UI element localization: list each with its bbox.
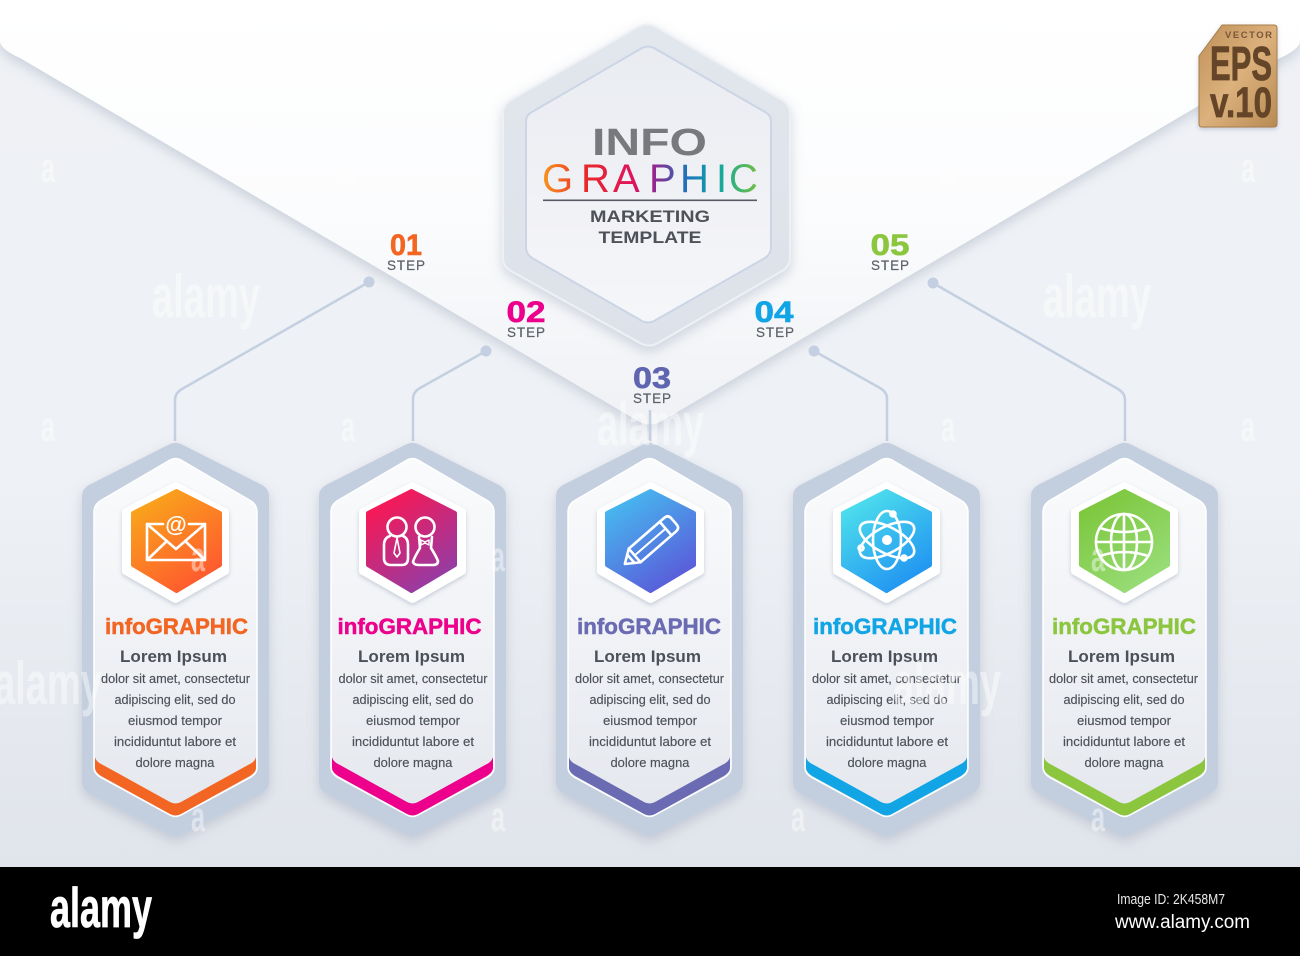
card subheading: Lorem Ipsum: [120, 647, 227, 666]
step label 04: [754, 296, 794, 340]
card body text: incididuntut labore et: [352, 735, 475, 749]
watermarks: a: [1091, 793, 1105, 840]
card subheading: Lorem Ipsum: [1068, 647, 1175, 666]
connector lines: [175, 276, 1125, 441]
card heading: infoGRAPHIC: [105, 614, 248, 639]
card body text: eiusmod tempor: [128, 714, 222, 728]
card body text: dolore magna: [610, 756, 690, 770]
card heading: infoGRAPHIC: [338, 614, 482, 639]
watermarks: alamy: [597, 391, 704, 458]
watermarks: a: [191, 793, 205, 840]
card body text: adipiscing elit, sed do: [1064, 693, 1185, 707]
card subheading: Lorem Ipsum: [594, 647, 701, 666]
card body text: dolor sit amet, consectetur: [338, 672, 488, 686]
card 2: [319, 443, 506, 836]
card body text: eiusmod tempor: [603, 714, 697, 728]
watermarks: a: [41, 403, 55, 450]
card body text: dolor sit amet, consectetur: [1049, 672, 1198, 686]
watermarks: a: [1241, 144, 1255, 191]
subtitle: marketing template: MARKETING: [590, 207, 710, 226]
step label 01: STEP: [387, 258, 425, 273]
watermarks: a: [1241, 403, 1255, 450]
watermarks: a: [41, 144, 55, 191]
watermarks: a: [491, 793, 505, 840]
card body text: incididuntut labore et: [1063, 735, 1186, 749]
card body text: [101, 672, 250, 770]
watermarks: alamy: [893, 650, 1001, 717]
watermarks: a: [491, 533, 505, 580]
top white envelope flap: [0, 0, 1300, 424]
watermarks: a: [941, 144, 955, 191]
step label 04: STEP: [756, 325, 794, 340]
icon: pencil: [601, 486, 700, 599]
step label 03: [633, 362, 671, 406]
card body text: adipiscing elit, sed do: [590, 693, 711, 707]
card 4: [793, 443, 980, 836]
card body text: eiusmod tempor: [840, 714, 934, 728]
step label 04: 04: [754, 296, 794, 329]
card body text: [575, 672, 724, 770]
card body text: incididuntut labore et: [589, 735, 712, 749]
card 3: [556, 443, 743, 836]
card body text: adipiscing elit, sed do: [352, 693, 474, 707]
icon: atom: [837, 486, 936, 599]
step label 05: 05: [870, 229, 910, 262]
subtitle: marketing template: [590, 207, 710, 247]
card body text: [1049, 672, 1198, 770]
card subheading: Lorem Ipsum: [358, 647, 465, 666]
step label 02: [506, 296, 546, 340]
card heading: infoGRAPHIC: [813, 614, 957, 639]
card 1: [82, 443, 269, 836]
step label 03: STEP: [633, 391, 671, 406]
icon: email envelope: [126, 486, 225, 599]
card body text: [812, 672, 961, 770]
card body text: dolor sit amet, consectetur: [812, 672, 961, 686]
title rule: [543, 200, 757, 201]
footer bar: [0, 867, 1300, 956]
card body text: dolore magna: [136, 756, 215, 770]
card heading: infoGRAPHIC: [577, 614, 721, 639]
watermarks: a: [941, 403, 955, 450]
watermarks: alamy: [152, 263, 260, 330]
watermarks: a: [341, 144, 355, 191]
watermarks: alamy: [1043, 263, 1151, 330]
card heading: infoGRAPHIC: [1052, 614, 1196, 639]
card body text: eiusmod tempor: [366, 714, 460, 728]
step label 02: 02: [506, 296, 546, 329]
card body text: dolore magna: [1084, 756, 1164, 770]
icon: globe: [1075, 486, 1174, 599]
step label 02: STEP: [507, 325, 545, 340]
footer image id: Image ID: 2K458M7: [1117, 891, 1225, 908]
card body text: adipiscing elit, sed do: [114, 693, 236, 707]
title: INFO: INFO: [592, 122, 707, 164]
step label 05: [870, 229, 910, 273]
card body text: incididuntut labore et: [826, 735, 949, 749]
card body text: eiusmod tempor: [1077, 714, 1171, 728]
card body text: dolor sit amet, consectetur: [575, 672, 724, 686]
card subheading: Lorem Ipsum: [831, 647, 938, 666]
watermarks: [0, 144, 1255, 840]
icon: business people: [363, 486, 462, 599]
card 5: [1031, 443, 1218, 836]
step label 03: 03: [633, 362, 671, 395]
card body text: incididuntut labore et: [114, 735, 237, 749]
watermarks: a: [1091, 533, 1105, 580]
subtitle: marketing template: TEMPLATE: [598, 228, 702, 247]
footer logo: alamy: [50, 876, 152, 939]
EPS version badge: VECTOR: [1225, 30, 1272, 41]
watermarks: a: [191, 533, 205, 580]
watermarks: a: [791, 793, 805, 840]
EPS version badge: [1199, 25, 1277, 127]
card body text: adipiscing elit, sed do: [826, 693, 948, 707]
card body text: dolore magna: [374, 756, 453, 770]
card body text: dolore magna: [848, 756, 927, 770]
icon: email envelope: @: [165, 512, 187, 537]
footer url: www.alamy.com: [1114, 912, 1250, 933]
title: GRAPHIC: GRAPHIC: [542, 157, 758, 201]
watermarks: a: [341, 403, 355, 450]
step label 01: 01: [390, 229, 422, 262]
step label 05: STEP: [871, 258, 909, 273]
card body text: dolor sit amet, consectetur: [101, 672, 250, 686]
card body text: [338, 672, 488, 770]
EPS version badge: v.10: [1210, 79, 1272, 127]
central title hexagon: [503, 24, 790, 346]
step label 01: [387, 229, 425, 273]
